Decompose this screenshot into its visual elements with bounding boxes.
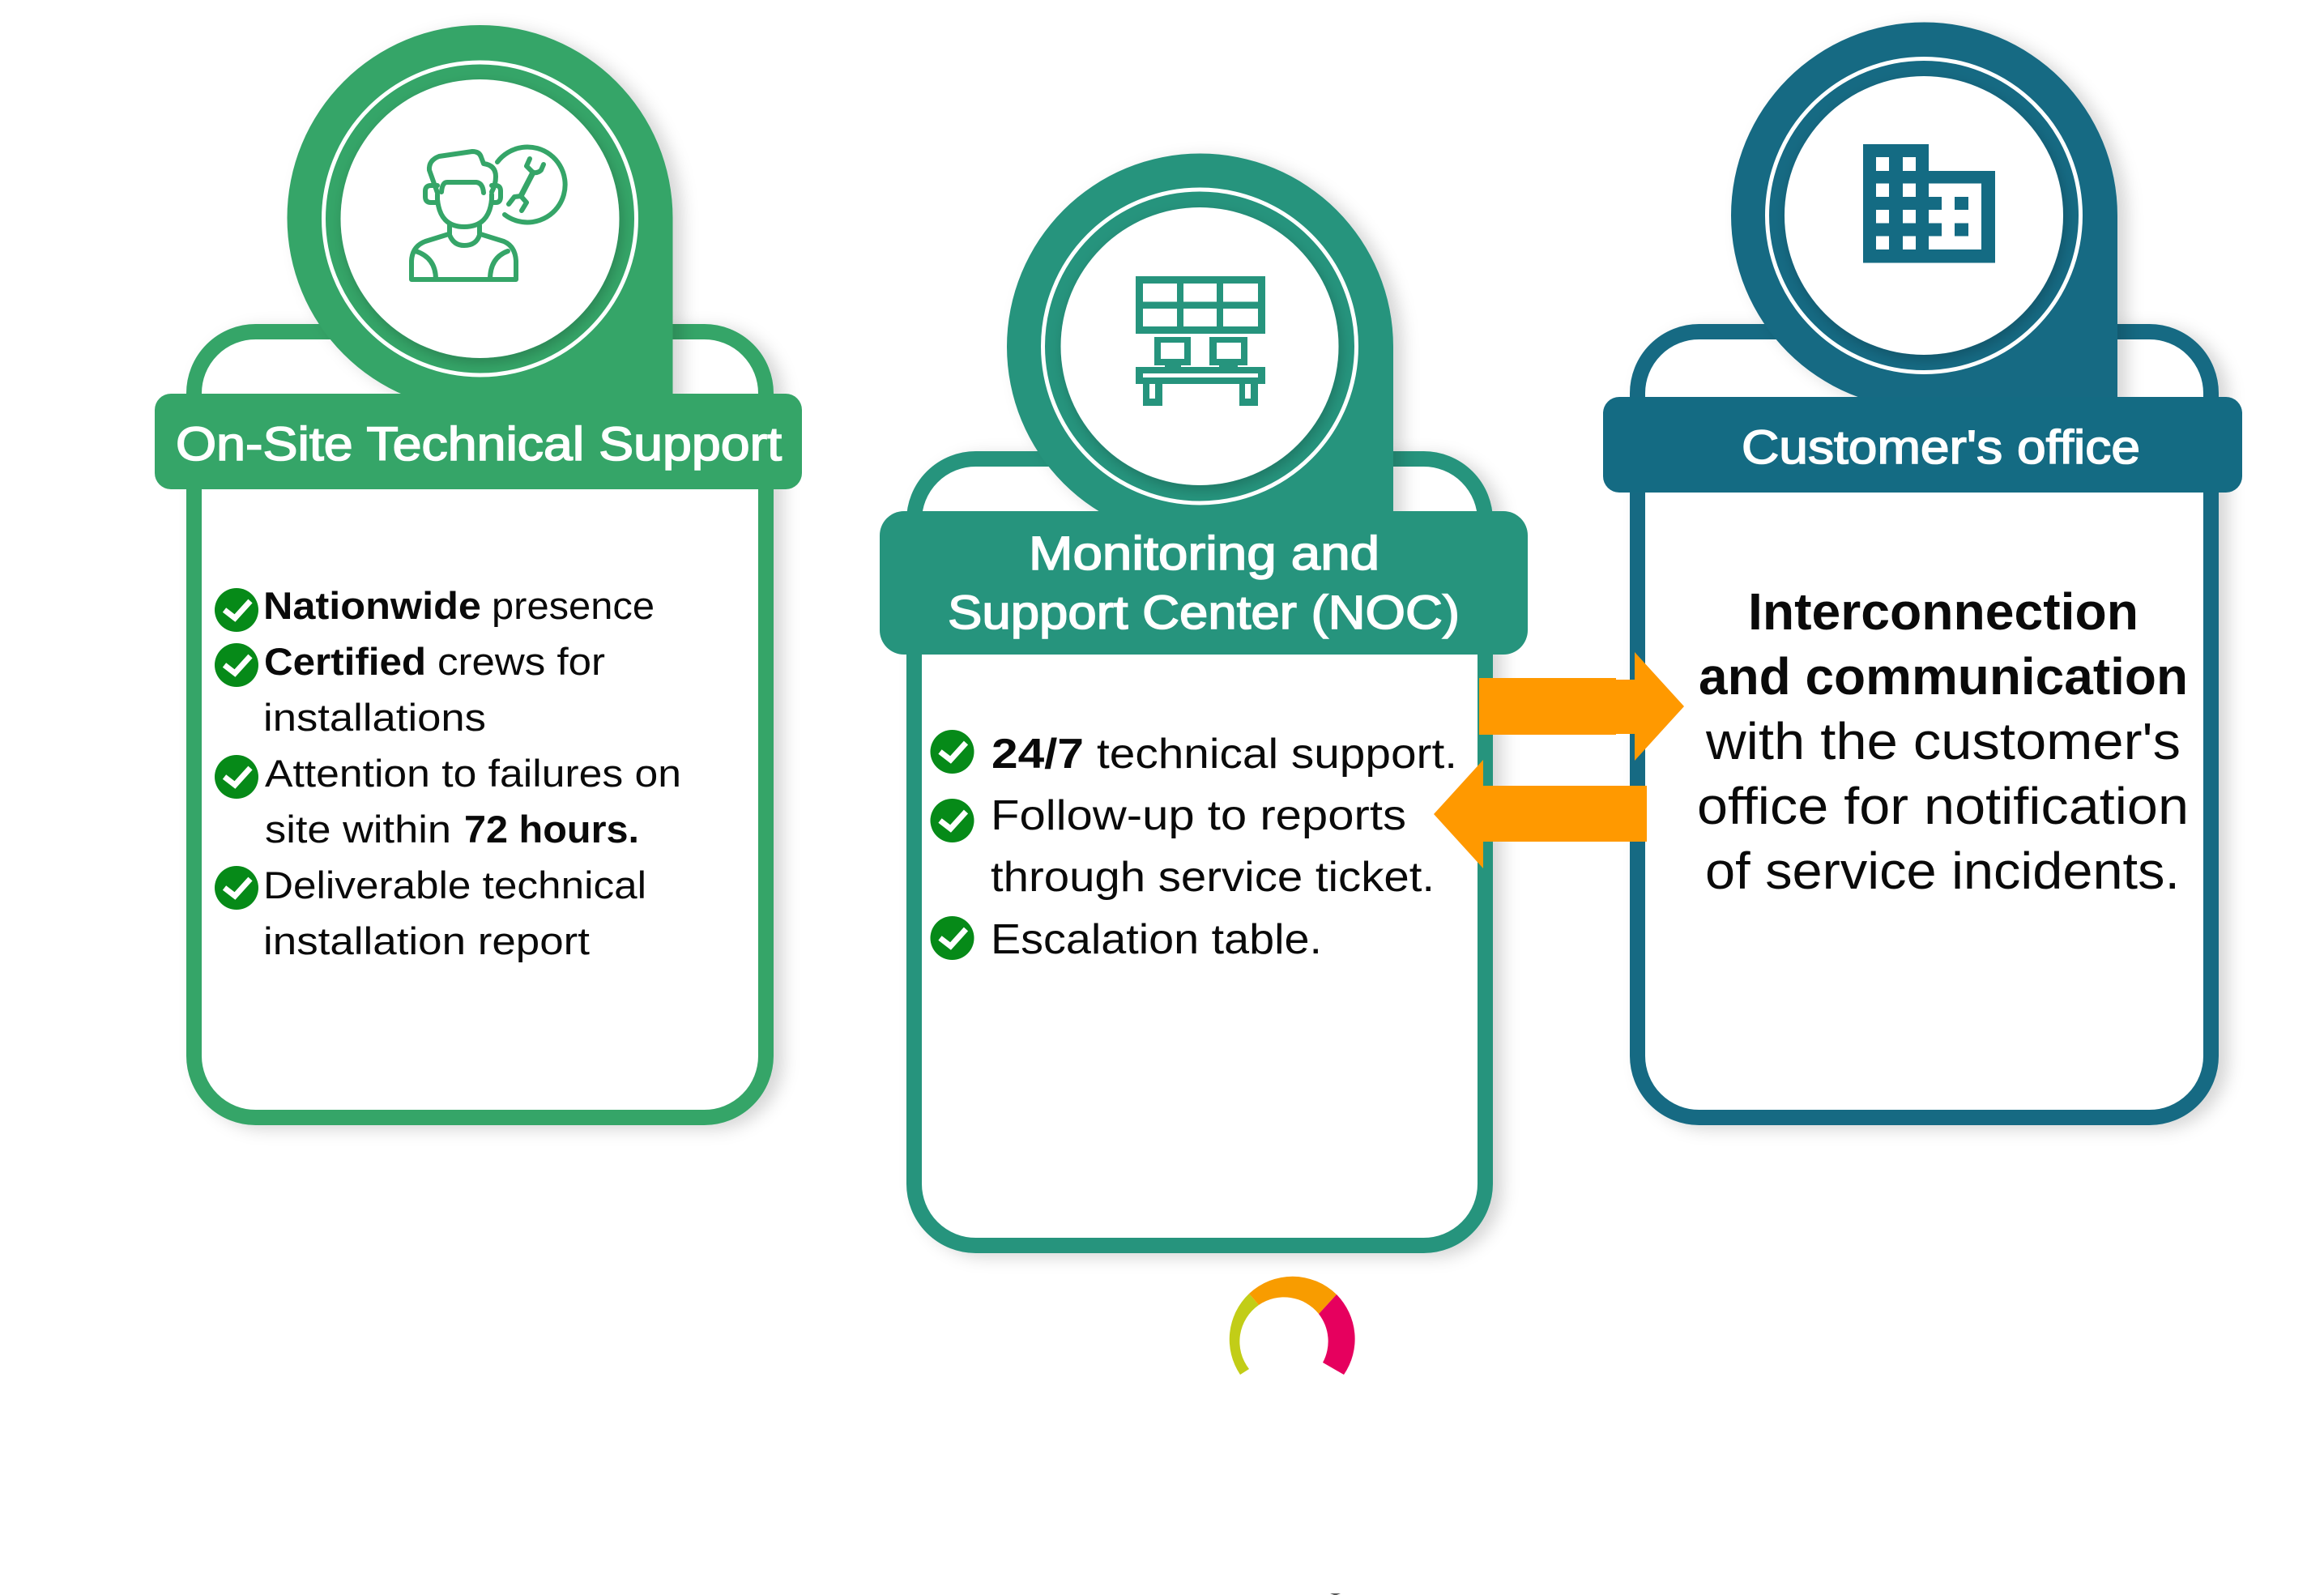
arrow: to monitoring center (1434, 760, 1647, 868)
card outline (914, 458, 1486, 1246)
description text: Interconnection (1748, 582, 2139, 641)
checklist item: certified crews (215, 640, 605, 739)
pin badge (1007, 153, 1393, 539)
checklist item: certified crews: installations (263, 696, 486, 739)
panel: monitoring and support center (880, 153, 1528, 1245)
heading: Support Center (NOC) (948, 586, 1460, 639)
icon: office building (1863, 144, 1995, 262)
pin badge (1731, 23, 2117, 409)
badge inner circle (1061, 207, 1338, 485)
checklist item: attention to failures (215, 752, 681, 851)
checklist item: deliverable report: installation report (263, 919, 590, 962)
heading (948, 527, 1460, 639)
checklist item: attention to failures: site within (265, 808, 451, 851)
icon: monitoring desk (1136, 276, 1265, 406)
checklist item: 24/7 support: 24/7 (991, 731, 1084, 778)
description text: and communication (1699, 647, 2188, 706)
panel: on-site technical support (155, 25, 802, 1118)
heading bar (880, 511, 1528, 655)
heading: On-Site Technical Support (176, 418, 782, 471)
heading bar (1603, 397, 2242, 493)
description text: office for notification (1697, 777, 2189, 835)
checklist item: attention to failures: 72 hours. (464, 808, 639, 851)
heading: Customer's office (1742, 421, 2140, 474)
card outline (194, 332, 766, 1118)
gauge segment: orange (1249, 1277, 1337, 1314)
description text: with the customer's (1705, 712, 2181, 770)
arrow: to customer's office (1479, 652, 1684, 761)
badge ring (1768, 58, 2080, 373)
badge inner circle (1785, 76, 2063, 355)
badge ring (1043, 190, 1356, 503)
checklist item: follow-up: through service ticket. (991, 854, 1435, 901)
icon: technician with wrench (411, 147, 565, 279)
badge inner circle (340, 79, 619, 358)
checklist item: follow-up: Follow-up to reports (991, 792, 1406, 839)
checklist item: certified crews: Certified (264, 640, 426, 683)
gauge segment: magenta (1319, 1294, 1355, 1375)
checklist item: deliverable report: Deliverable technical (263, 864, 646, 906)
description text: of service incidents. (1705, 842, 2180, 900)
checklist item: 24/7 support: technical support. (1097, 731, 1457, 778)
heading: Monitoring and (1029, 527, 1379, 580)
description text (1697, 582, 2189, 900)
pin badge (287, 25, 673, 411)
checklist item: deliverable report (215, 864, 646, 962)
heading bar (155, 394, 802, 489)
checklist item: escalation: Escalation table. (991, 916, 1322, 963)
checklist item: nationwide (215, 584, 655, 632)
checklist item: attention to failures: Attention to failures on (265, 752, 681, 795)
gauge (1230, 1277, 1355, 1375)
gauge segment: lime (1230, 1294, 1259, 1375)
panel: customer's office (1603, 23, 2242, 1118)
checklist item: nationwide: Nationwide (263, 584, 481, 627)
card outline (1638, 332, 2211, 1118)
badge ring (324, 62, 637, 375)
checklist item: follow-up (930, 792, 1435, 901)
checklist item: 24/7 support (930, 730, 1457, 778)
checklist item: nationwide: presence (492, 584, 655, 627)
checklist item: certified crews: crews for (437, 640, 605, 683)
small cropped mark at bottom edge (1330, 1593, 1341, 1595)
